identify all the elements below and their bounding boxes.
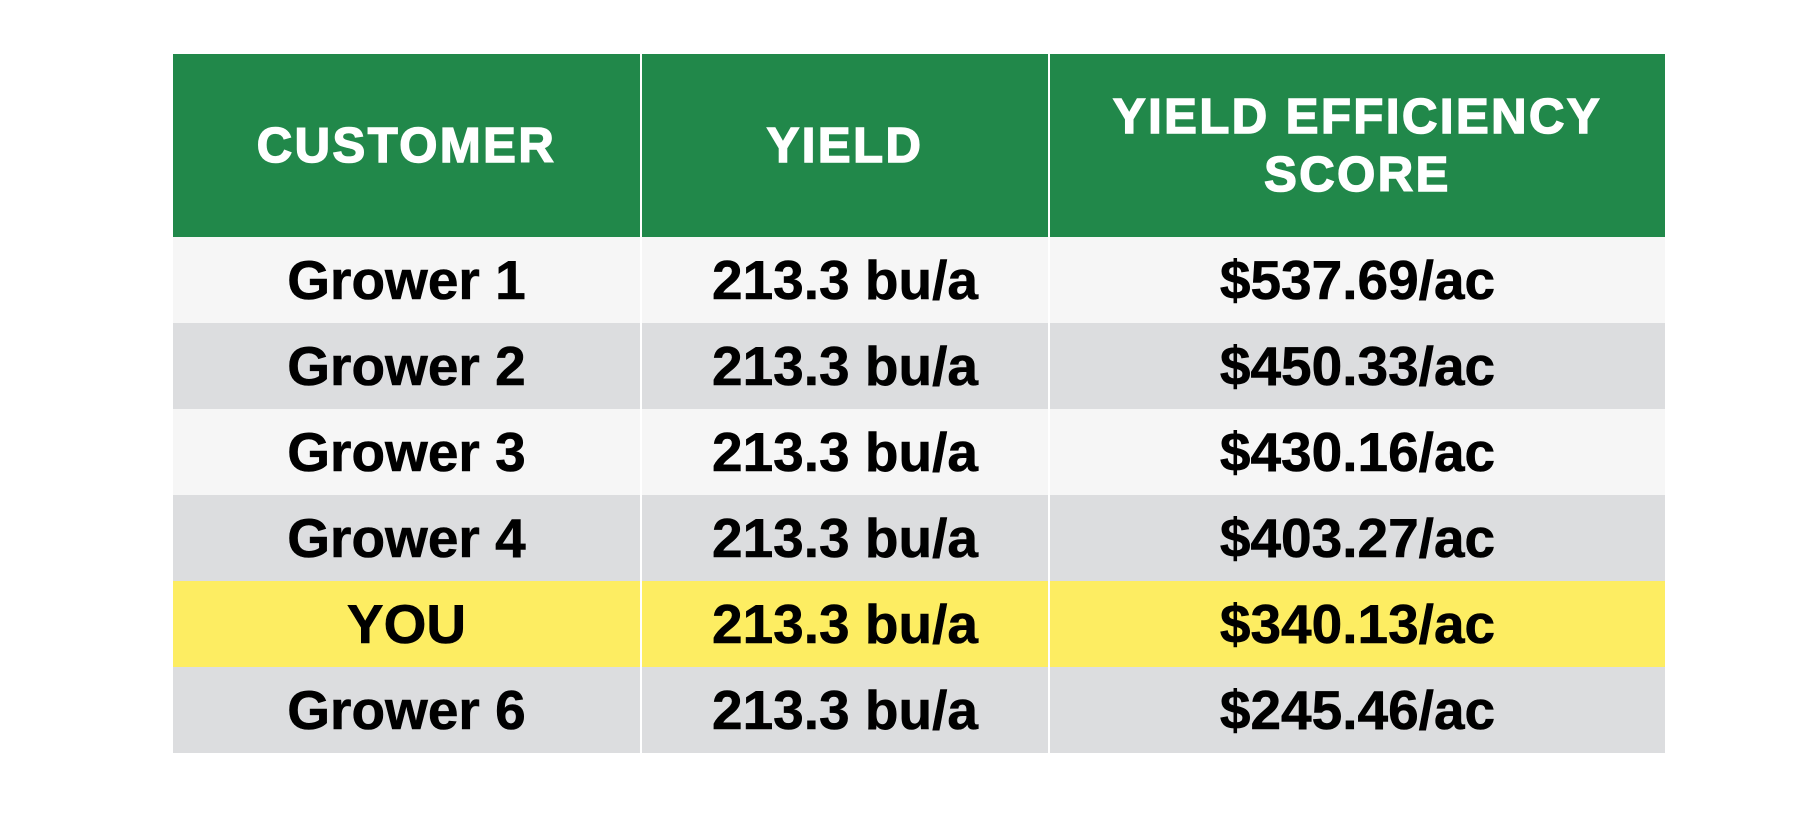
row: Grower 1 [173, 237, 1665, 323]
row: YOU highlighted: 213.3 bu/a [712, 593, 978, 655]
row: Grower 4: 213.3 bu/a [712, 507, 978, 569]
row: Grower 4: $403.27/ac [1220, 507, 1495, 569]
header row: YIELD EFFICIENCY [1113, 90, 1602, 144]
header row: CUSTOMER [257, 118, 556, 172]
table: yield efficiency comparison [173, 54, 1665, 753]
row: YOU highlighted: $340.13/ac [1220, 593, 1495, 655]
header row [173, 54, 1665, 237]
row: Grower 4: Grower 4 [287, 507, 526, 569]
row: Grower 4 [173, 495, 1665, 581]
row: Grower 2 [173, 323, 1665, 409]
row: Grower 3: $430.16/ac [1220, 421, 1495, 483]
row: Grower 1: $537.69/ac [1220, 249, 1495, 311]
header row: YIELD [767, 118, 923, 172]
row: Grower 6 [173, 667, 1665, 753]
row: Grower 2: Grower 2 [287, 335, 526, 397]
row: YOU highlighted [173, 581, 1665, 667]
row: Grower 6: $245.46/ac [1220, 679, 1495, 741]
row: Grower 6: 213.3 bu/a [712, 679, 978, 741]
row: Grower 1: Grower 1 [287, 249, 526, 311]
row: Grower 2: $450.33/ac [1220, 335, 1495, 397]
row: Grower 6: Grower 6 [287, 679, 526, 741]
row: Grower 3 [173, 409, 1665, 495]
row: Grower 3: 213.3 bu/a [712, 421, 978, 483]
row: Grower 3: Grower 3 [287, 421, 526, 483]
row: Grower 1: 213.3 bu/a [712, 249, 978, 311]
row: Grower 2: 213.3 bu/a [712, 335, 978, 397]
header row: SCORE [1264, 148, 1451, 202]
row: YOU highlighted: YOU [347, 593, 466, 655]
